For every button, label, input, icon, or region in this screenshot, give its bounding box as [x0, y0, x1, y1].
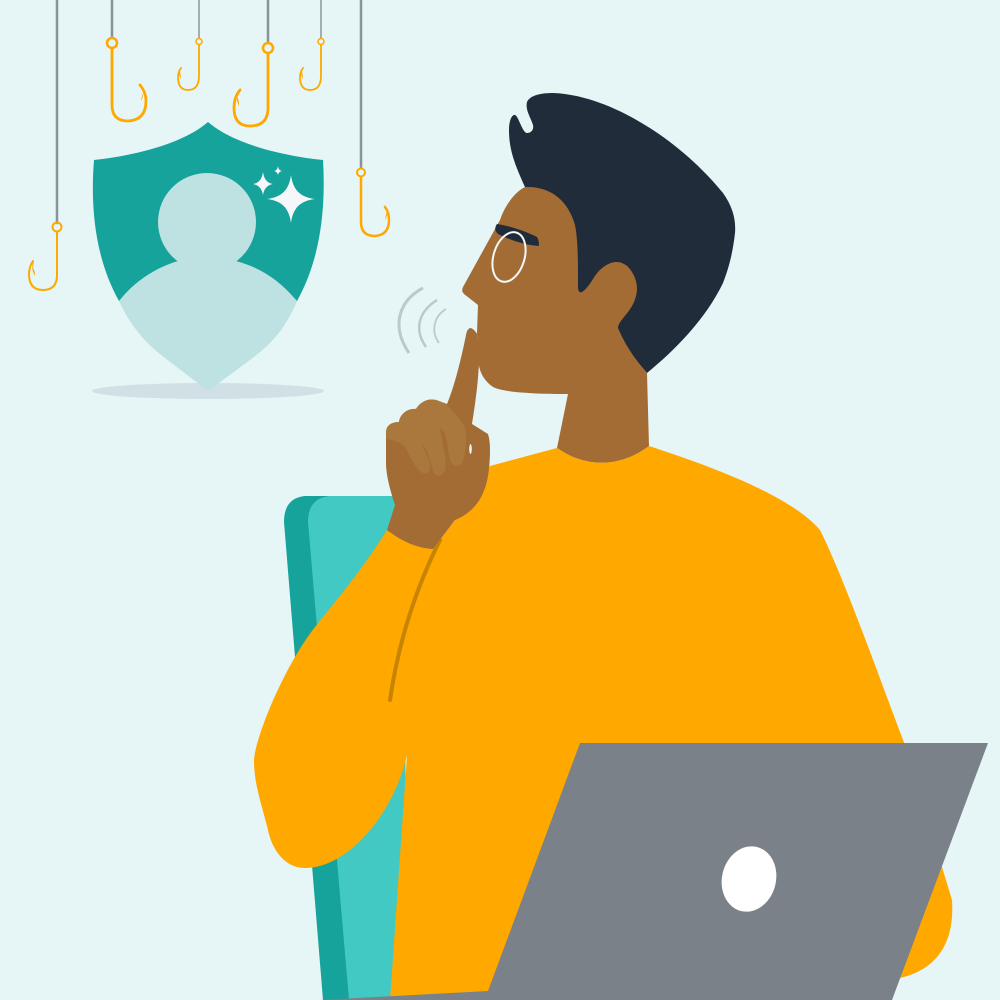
hair [509, 93, 735, 373]
chair seat highlight [308, 496, 410, 1000]
gap between finger and fist [469, 444, 472, 454]
glasses [487, 228, 531, 286]
head and neck [462, 187, 649, 463]
hand [386, 328, 490, 549]
icon: shield with user [93, 122, 324, 391]
hook 5 [300, 0, 324, 90]
hook 4 [234, 0, 273, 126]
sleeve crease [390, 540, 440, 700]
sound waves [399, 288, 446, 353]
laptop [320, 743, 988, 1000]
user head [158, 173, 256, 271]
eyebrow [495, 224, 539, 246]
sweater body [254, 446, 952, 1000]
hook 6 [357, 0, 389, 236]
laptop logo [715, 840, 783, 918]
chair [284, 496, 410, 1000]
hook 1 [29, 0, 62, 290]
user body [119, 261, 297, 391]
shield shadow [92, 383, 324, 399]
hook 3 [178, 0, 202, 90]
fingers [386, 399, 466, 476]
hook 2 [107, 0, 146, 121]
sparkles [253, 166, 315, 223]
